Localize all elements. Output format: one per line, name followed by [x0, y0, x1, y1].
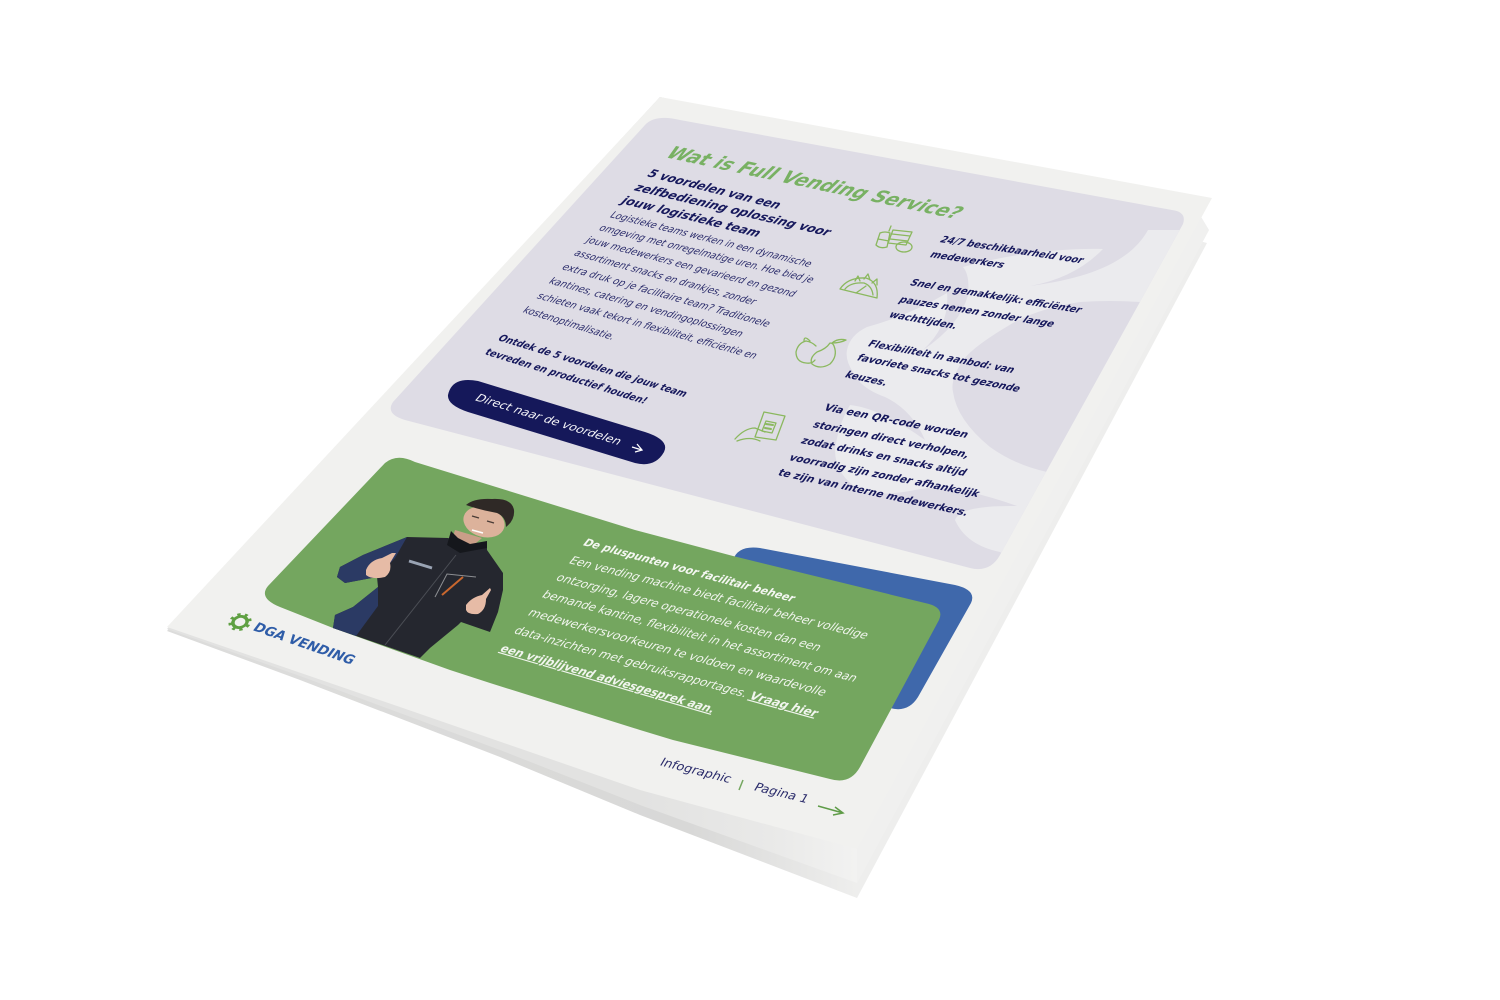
list of benefits: zodat drinks en snacks altijd — [798, 435, 970, 478]
list of benefits — [775, 234, 1087, 518]
left sleeve — [333, 537, 407, 636]
heading: 5 voordelen: 5 voordelen van een — [643, 167, 785, 212]
list of benefits: storingen direct verholpen, — [810, 419, 973, 460]
title: Wat is Full Vending Service? — [660, 144, 969, 223]
jacket logo — [409, 561, 432, 568]
intro text block — [520, 209, 818, 361]
call to discover text: Ontdek de 5 voordelen die jouw team — [495, 332, 691, 399]
neck — [452, 530, 482, 548]
panel: green facility management panel — [265, 458, 940, 780]
paper stack behind the top sheet — [167, 97, 1209, 898]
heading: 5 voordelen: zelfbediening oplossing voor — [630, 181, 835, 239]
list of benefits: keuzes. — [842, 369, 891, 388]
list of benefits: favoriete snacks tot gezonde — [854, 352, 1024, 394]
green panel text: een vrijblijvend adviesgesprek aan. — [497, 642, 719, 715]
face — [460, 502, 508, 542]
hair — [466, 499, 514, 527]
button: direct naar de voordelen: Direct naar de voordelen — [472, 392, 625, 447]
green panel text: data-inzichten met gebruiksrapportages. Vraag hier — [511, 624, 823, 720]
footer: page label: Infographic — [657, 755, 735, 786]
list of benefits: te zijn van interne medewerkers. — [775, 467, 972, 518]
list of benefits: pauzes nemen zonder lange — [896, 294, 1058, 329]
intro text block: assortiment snacks en drankjes, zonder — [571, 247, 760, 307]
logo: DGA Vending: DGA VENDING — [250, 620, 358, 668]
left hand — [366, 553, 396, 578]
call to discover text: tevreden en productief houden! — [482, 346, 651, 406]
facial features — [472, 516, 494, 523]
list of benefits: wachttijden. — [886, 309, 961, 331]
logo: DGA Vending — [226, 612, 358, 668]
green panel text: De pluspunten voor facilitair beheer — [580, 536, 799, 604]
button: direct naar de voordelen — [448, 380, 665, 464]
icon: phone with QR code — [735, 412, 785, 441]
icon: apple and pear — [796, 338, 846, 367]
green panel text: bemande kantine, flexibiliteit in het assortiment om aan — [539, 588, 861, 684]
intro text block: extra druk op je facilitaire team? Traditionele — [559, 261, 774, 329]
icon: drinks and snacks — [876, 226, 912, 252]
orange pocket accent — [442, 577, 463, 595]
intro text block: kantines, catering en vendingoplossingen — [546, 275, 747, 339]
green panel text: medewerkersvoorkeuren te voldoen en waardevolle — [525, 606, 831, 698]
list of benefits: Snel en gemakkelijk: efficiënter — [907, 277, 1086, 316]
arrow: next page — [818, 806, 843, 815]
green panel text: ontzorging, lagere operationele kosten dan een — [553, 571, 825, 653]
list of benefits: voorradig zijn zonder afhankelijk — [786, 452, 983, 500]
heading: 5 voordelen — [616, 167, 835, 240]
jacket — [333, 537, 503, 658]
icon: gear — [226, 612, 254, 632]
list of benefits: medewerkers — [927, 249, 1008, 270]
panel: lavender intro panel — [391, 118, 1200, 580]
intro text block: kostenoptimalisatie. — [520, 304, 618, 342]
heading: 5 voordelen: jouw logistieke team — [616, 194, 765, 240]
person giving thumbs up — [333, 499, 514, 658]
blue accent block behind green panel — [733, 548, 972, 709]
right hand — [466, 588, 491, 614]
footer: page label: Pagina 1 — [751, 780, 812, 806]
icon: speedometer — [840, 274, 877, 298]
list of benefits: 24/7 beschikbaarheid voor — [937, 234, 1087, 266]
intro text block: jouw medewerkers een gevarieerd en gezond — [582, 234, 800, 299]
top sheet — [167, 97, 1212, 849]
list of benefits: Flexibiliteit in aanbod: van — [865, 338, 1018, 375]
footer: page label — [657, 755, 812, 806]
green panel text: Een vending machine biedt facilitair beheer volledige — [566, 554, 873, 641]
list of benefits: Via een QR-code worden — [821, 402, 972, 440]
intro text block: schieten vaak tekort in flexibiliteit, efficiëntie en — [534, 290, 761, 361]
zipper — [385, 555, 456, 645]
collar — [447, 531, 487, 553]
intro text block: omgeving met onregelmatige uren. Hoe bied je — [596, 222, 818, 285]
intro text block: Logistieke teams werken in een dynamische — [607, 209, 816, 269]
chest pocket — [435, 574, 476, 597]
green panel text — [497, 536, 873, 720]
